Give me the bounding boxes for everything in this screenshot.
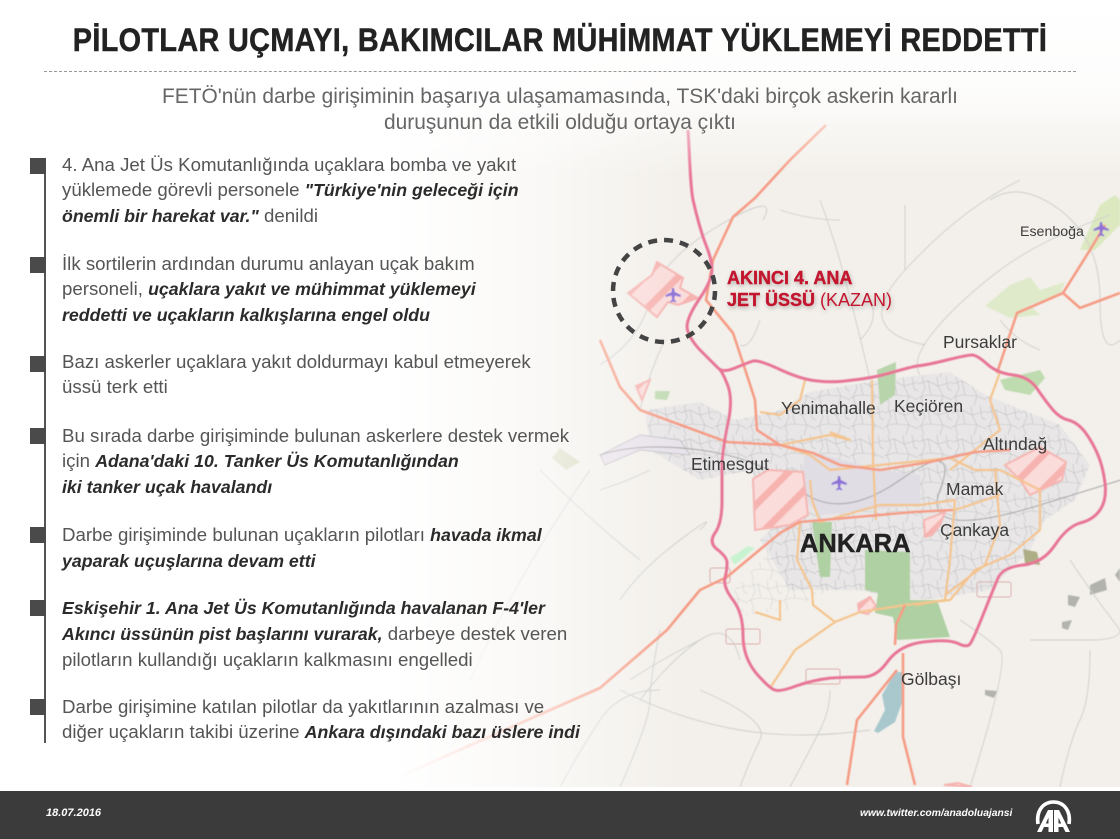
subtitle: FETÖ'nün darbe girişiminin başarıya ulaşamamasında, TSK'daki birçok askerin kararlı <box>162 85 958 108</box>
base label <box>727 268 892 310</box>
lake <box>874 672 903 733</box>
title: PİLOTLAR UÇMAYI, BAKIMCILAR MÜHİMMAT YÜKLEMEYİ REDDETTİ <box>73 22 1047 58</box>
place labels: Yenimahalle <box>781 398 876 418</box>
empty rectangles <box>710 568 1011 684</box>
place labels: Keçiören <box>894 396 963 416</box>
text 1: yüklemede görevli personele "Türkiye'nin geleceği için <box>62 179 519 200</box>
text 6: pilotların kullandığı uçakların kalkmasını engelledi <box>62 649 473 670</box>
place labels <box>691 224 1084 689</box>
text 4: iki tanker uçak havalandı <box>62 477 272 497</box>
gray local roads <box>470 180 1120 787</box>
text 5: Darbe girişiminde bulunan uçakların pilotları havada ikmal <box>62 524 542 545</box>
text 1 <box>62 154 519 226</box>
text 6: Akıncı üssünün pist başlarını vurarak, darbeye destek veren <box>62 623 567 644</box>
date: 18.07.2016 <box>46 807 101 819</box>
bullet 5 <box>30 527 46 543</box>
text 3 <box>62 351 531 397</box>
source link: www.twitter.com/anadoluajansi <box>860 808 1012 819</box>
text 7: Darbe girişimine katılan pilotlar da yakıtlarının azalması ve <box>62 696 544 717</box>
timeline line <box>44 160 46 743</box>
urban areas <box>380 125 1120 787</box>
text 2 <box>62 253 476 325</box>
text 5 <box>61 524 542 571</box>
text 3: üssü terk etti <box>62 376 168 397</box>
place labels: Etimesgut <box>691 454 769 474</box>
text 1: önemli bir harekat var." denildi <box>62 205 318 226</box>
bullet 2 <box>30 257 46 273</box>
text 2: personeli, uçaklara yakıt ve mühimmat yüklemeyi <box>62 278 476 299</box>
text 7 <box>62 696 580 742</box>
text 5: yaparak uçuşlarına devam etti <box>62 551 316 571</box>
place labels: Çankaya <box>940 520 1009 540</box>
yellow roads <box>755 372 1040 688</box>
base label: AKINCI 4. ANA <box>727 268 852 288</box>
text 7: diğer uçakların takibi üzerine Ankara dışındaki bazı üslere indi <box>62 721 580 742</box>
icon: AA logo <box>1036 800 1072 832</box>
text 6 <box>62 598 567 670</box>
place labels: Pursaklar <box>943 332 1017 352</box>
place labels: Mamak <box>946 479 1004 499</box>
white fade top <box>0 0 1120 175</box>
text 6: Eskişehir 1. Ana Jet Üs Komutanlığında havalanan F-4'ler <box>62 598 545 618</box>
military zones hatched <box>628 262 1066 787</box>
place labels: ANKARA <box>800 530 910 558</box>
text 4 <box>62 425 569 497</box>
text 4: Bu sırada darbe girişiminde bulunan askerlere destek vermek <box>62 425 569 446</box>
pink ring road <box>687 130 1105 690</box>
subtitle <box>162 85 958 134</box>
text 4: için Adana'daki 10. Tanker Üs Komutanlığından <box>62 450 459 471</box>
place labels: Esenboğa <box>1020 224 1084 240</box>
dashed circle <box>613 240 715 342</box>
subtitle: duruşunun da etkili olduğu ortaya çıktı <box>384 111 736 134</box>
white fade left <box>0 0 680 787</box>
place labels: Altındağ <box>983 434 1047 454</box>
place labels: Gölbaşı <box>901 669 961 689</box>
bullet 7 <box>30 699 46 715</box>
footer <box>0 791 1120 839</box>
salmon highways <box>380 125 1120 785</box>
bullet 1 <box>30 158 46 174</box>
text 1: 4. Ana Jet Üs Komutanlığında uçaklara bomba ve yakıt <box>62 154 516 175</box>
text 2: İlk sortilerin ardından durumu anlayan uçak bakım <box>62 253 475 274</box>
airport icons <box>666 222 1109 490</box>
bullet 4 <box>30 428 46 444</box>
title divider <box>44 71 1076 72</box>
text 3: Bazı askerler uçaklara yakıt doldurmayı kabul etmeyerek <box>62 351 531 372</box>
bullet 6 <box>30 600 46 616</box>
bullet 3 <box>30 356 46 372</box>
base label: JET ÜSSÜ (KAZAN) <box>727 290 892 310</box>
parks and forests <box>865 550 950 640</box>
text 2: reddetti ve uçakların kalkışlarına engel oldu <box>62 305 430 325</box>
